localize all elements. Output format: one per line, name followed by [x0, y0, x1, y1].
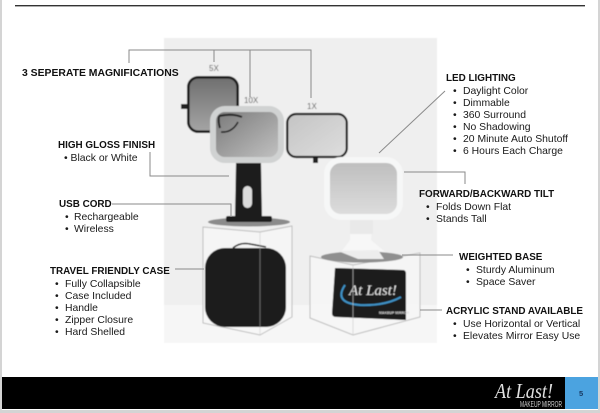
text block: USB cord: USB CORD: [59, 199, 112, 210]
magnification labels: [209, 64, 317, 111]
text block: weighted base: Space Saver: [476, 277, 536, 288]
text block: weighted base: WEIGHTED BASE: [459, 252, 543, 263]
text block: LED lighting: 360 Surround: [463, 110, 526, 121]
magnification labels: 1X: [307, 102, 317, 111]
page number: [565, 377, 598, 409]
text block: high gloss finish: HIGH GLOSS FINISH: [58, 140, 155, 151]
mirror: 5X magnification: [181, 77, 238, 132]
mirror: 10X magnification: [213, 109, 281, 160]
product photo: [164, 38, 437, 343]
callout lines: [112, 50, 465, 310]
photo backdrop: [164, 38, 437, 343]
text block: travel friendly case: Case Included: [65, 291, 132, 302]
footer logo: MAKEUP MIRROR: [520, 400, 562, 409]
text block: USB cord: Rechargeable: [74, 212, 139, 223]
text block: LED lighting: Dimmable: [463, 98, 510, 109]
text block: forward/backward tilt: Folds Down Flat: [436, 202, 511, 213]
pouch with logo: [332, 268, 410, 320]
text block: LED lighting: •: [453, 146, 457, 157]
text block: acrylic stand available: •: [453, 319, 457, 330]
footer bar: [2, 377, 598, 409]
text block: forward/backward tilt: [419, 189, 554, 225]
text block: forward/backward tilt: FORWARD/BACKWARD TILT: [419, 189, 554, 200]
text block: weighted base: •: [466, 277, 470, 288]
travel case: [205, 248, 286, 327]
text block: travel friendly case: •: [55, 315, 59, 326]
text block: travel friendly case: Hard Shelled: [65, 327, 125, 338]
pouch with logo: MAKEUP MIRROR: [379, 311, 410, 315]
text block: travel friendly case: Handle: [65, 303, 98, 314]
text block: travel friendly case: •: [55, 291, 59, 302]
text block: LED lighting: No Shadowing: [463, 122, 531, 133]
text block: weighted base: [459, 252, 555, 288]
text block: travel friendly case: TRAVEL FRIENDLY CASE: [50, 266, 170, 277]
magnification labels: 5X: [209, 64, 219, 73]
black mirror stand: [208, 163, 290, 226]
text block: travel friendly case: •: [55, 327, 59, 338]
text block: USB cord: [59, 199, 139, 235]
text block: LED lighting: •: [453, 110, 457, 121]
text block: LED lighting: •: [453, 86, 457, 97]
text block: LED lighting: 20 Minute Auto Shutoff: [463, 134, 568, 145]
text block: forward/backward tilt: •: [426, 214, 430, 225]
page number: 5: [579, 389, 583, 398]
text block: LED lighting: •: [453, 134, 457, 145]
footer logo: At Last!: [493, 379, 553, 403]
text block: LED lighting: [446, 73, 568, 157]
text block: weighted base: Sturdy Aluminum: [476, 265, 555, 276]
text block: LED lighting: •: [453, 98, 457, 109]
text block: USB cord: •: [65, 212, 69, 223]
text block: acrylic stand available: [446, 306, 583, 342]
text block: travel friendly case: Fully Collapsible: [65, 279, 141, 290]
top rule: [15, 5, 585, 6]
text block: travel friendly case: Zipper Closure: [65, 315, 133, 326]
text block: forward/backward tilt: •: [426, 202, 430, 213]
text block: LED lighting: •: [453, 122, 457, 133]
text block: travel friendly case: •: [55, 303, 59, 314]
white mirror: [327, 160, 400, 256]
pouch with logo: At Last!: [348, 283, 397, 299]
mirror: 1X magnification: [287, 114, 347, 163]
text block: USB cord: •: [65, 224, 69, 235]
text block: high gloss finish: [58, 140, 155, 164]
acrylic stand with pouch: [310, 250, 420, 335]
text block: travel friendly case: •: [55, 279, 59, 290]
text block: forward/backward tilt: Stands Tall: [436, 214, 487, 225]
text block: LED lighting: Daylight Color: [463, 86, 529, 97]
magnification labels: 10X: [244, 96, 259, 105]
text block: high gloss finish: • Black or White: [64, 153, 138, 164]
heading: 3 separate magnifications: 3 SEPERATE MAGNIFICATIONS: [22, 68, 179, 79]
text block: weighted base: •: [466, 265, 470, 276]
text block: travel friendly case: [50, 266, 170, 338]
text block: LED lighting: 6 Hours Each Charge: [463, 146, 563, 157]
text block: USB cord: Wireless: [74, 224, 114, 235]
text block: acrylic stand available: Use Horizontal or Vertical: [463, 319, 580, 330]
text block: acrylic stand available: Elevates Mirror Easy Use: [463, 331, 580, 342]
text block: acrylic stand available: •: [453, 331, 457, 342]
acrylic stand with case: [203, 226, 292, 335]
text block: LED lighting: LED LIGHTING: [446, 73, 516, 84]
text block: acrylic stand available: ACRYLIC STAND AVAILABLE: [446, 306, 583, 317]
